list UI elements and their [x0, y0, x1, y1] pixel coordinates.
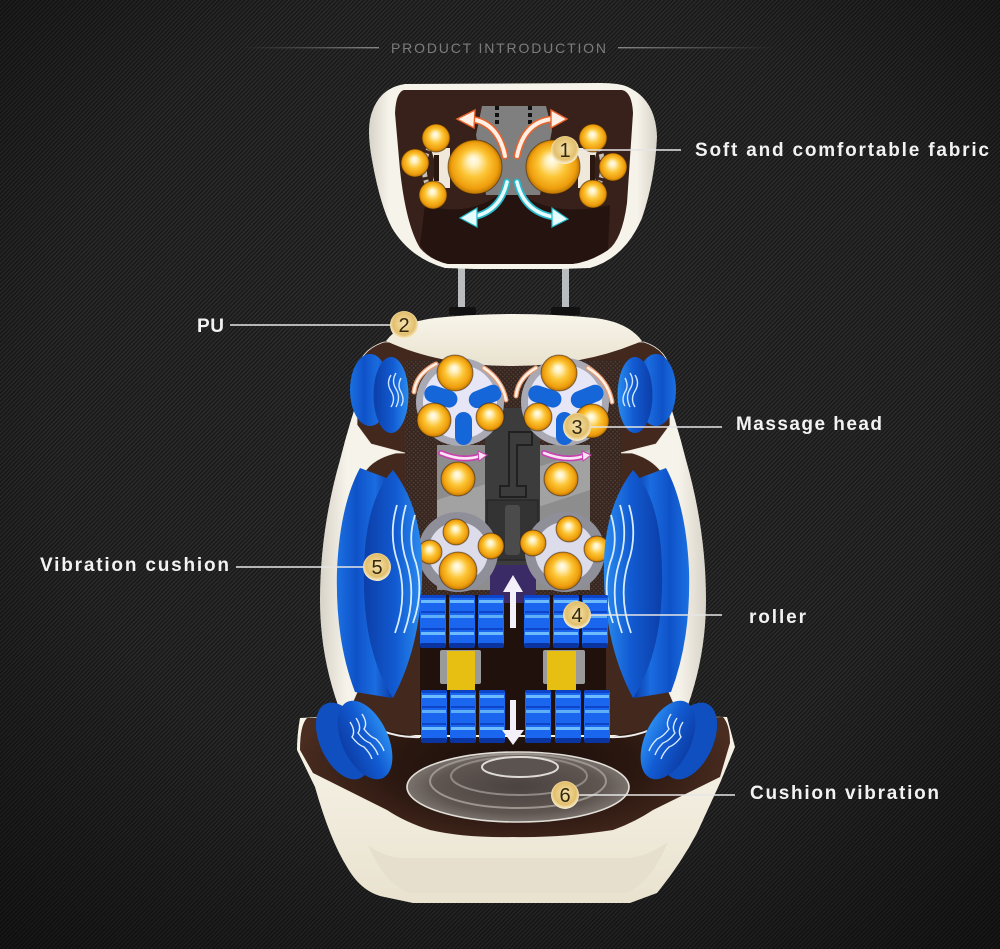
seat woven lower panel	[368, 842, 668, 893]
callout 4: roller: roller	[749, 607, 807, 628]
seat back lower white trim	[380, 730, 650, 737]
callout 3: massage head: Massage head	[736, 414, 882, 435]
callout 3: massage head: 3	[571, 417, 583, 439]
up arrow	[503, 575, 523, 628]
headrest	[369, 83, 657, 315]
lower left rotor	[418, 512, 504, 592]
callout 6: cushion vibration: 6	[559, 785, 571, 807]
lower right rotor	[520, 512, 610, 592]
massage ball: right group	[526, 124, 627, 208]
upper right rotor	[521, 355, 609, 446]
callout 6: cushion vibration	[551, 781, 939, 809]
headrest posts	[449, 262, 580, 315]
cyan arrows	[460, 182, 568, 227]
seat cream base	[297, 716, 735, 903]
side pad right	[629, 692, 728, 788]
callout 1: fabric: 1	[559, 140, 571, 162]
seat brown surface	[300, 717, 730, 837]
back brown upholstery	[345, 342, 681, 742]
shoulder cushion right	[618, 354, 676, 433]
centre mesh panel	[405, 360, 621, 600]
callout 5: vibration cushion: 5	[371, 557, 383, 579]
central control unit	[485, 408, 540, 565]
callout 1: fabric: Soft and comfortable fabric	[695, 140, 989, 161]
roller blocks lower left	[421, 690, 505, 743]
vibration cushion left	[337, 468, 422, 698]
callout 2: PU	[197, 311, 418, 339]
roller blocks lower right	[525, 690, 610, 743]
shoulder cushion left	[350, 354, 408, 433]
grey massage track	[437, 445, 590, 590]
middle massage balls	[441, 462, 578, 496]
seat vibration ripples	[407, 752, 629, 822]
title: product introduction: PRODUCT INTRODUCTION	[391, 40, 606, 56]
arrow down	[502, 700, 524, 745]
roller blocks upper left	[420, 595, 504, 648]
headrest white shell	[369, 83, 657, 269]
massage ball: left group	[401, 124, 502, 209]
callout 4: roller: 4	[571, 605, 583, 627]
callout 4: roller	[563, 601, 807, 629]
roller blocks upper right	[524, 595, 608, 648]
callout 3: massage head	[563, 413, 882, 441]
vibration cushion right	[604, 468, 689, 698]
yellow block left	[440, 650, 481, 690]
callout 6: cushion vibration: Cushion vibration	[750, 783, 939, 804]
headrest brown fabric panel	[395, 90, 633, 264]
callout 2: PU: 2	[398, 315, 410, 337]
upper left rotor	[416, 355, 504, 446]
side pad left	[305, 692, 404, 788]
yellow block right	[543, 650, 585, 690]
massage seat back	[320, 314, 706, 745]
callout 5: vibration cushion: Vibration cushion	[40, 555, 229, 576]
neck unit backing	[476, 106, 552, 195]
headrest lower dark shading	[420, 185, 610, 264]
callout 5: vibration cushion	[40, 553, 391, 581]
orange arrows	[457, 110, 567, 156]
back white frame	[320, 345, 706, 716]
rotation arrows	[414, 364, 612, 461]
seat cushion	[297, 690, 735, 903]
callout 2: PU: PU	[197, 316, 224, 337]
callout 1: fabric	[551, 136, 989, 164]
PU top cap	[386, 314, 642, 366]
